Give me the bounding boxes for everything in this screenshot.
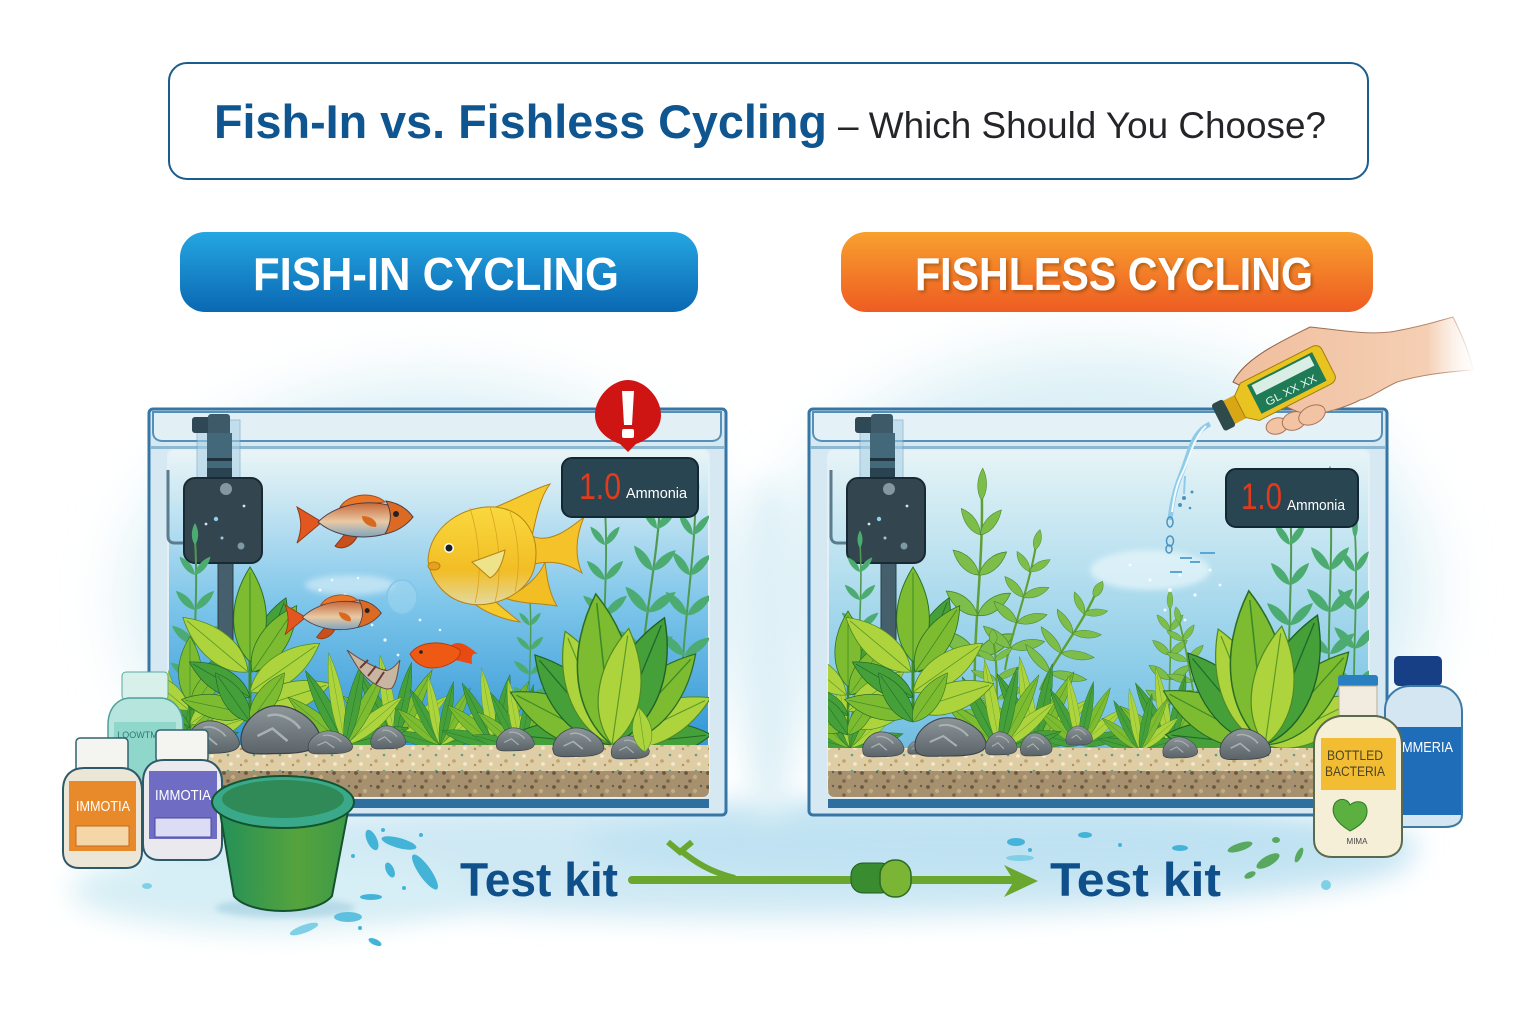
blue bottle: MMERIA	[1402, 739, 1453, 756]
gravel substrate	[828, 748, 1313, 797]
ammonia readout	[1226, 469, 1358, 527]
water	[828, 450, 1369, 797]
label: test kit right: Test kit	[1050, 853, 1221, 906]
fish: orange fish top	[297, 495, 413, 548]
water pour stream	[1166, 424, 1210, 553]
fish: large yellow fish	[428, 484, 584, 622]
bottled bacteria bottle: BACTERIA	[1325, 763, 1386, 779]
teal bottle: LOOWTMILLI	[117, 730, 173, 740]
label: test kit left: Test kit	[460, 853, 618, 906]
rocks	[185, 706, 649, 759]
ammonia readout: Ammonia	[1287, 497, 1346, 514]
orange bottle	[63, 738, 142, 868]
bucket	[212, 776, 355, 918]
dosing bottle	[1208, 343, 1338, 437]
hand	[1233, 317, 1473, 417]
water	[168, 450, 709, 797]
hand pouring bottle	[1208, 317, 1473, 437]
water sparkles	[318, 577, 441, 656]
panel: fishless aquarium	[787, 409, 1387, 815]
water droplets: right	[1006, 832, 1331, 890]
fingers	[1264, 401, 1328, 437]
bubble	[387, 580, 417, 614]
filter	[168, 414, 262, 652]
gravel substrate	[168, 745, 709, 798]
header pill: fishless cycling: FISHLESS CYCLING	[915, 248, 1313, 300]
teal bottle	[108, 672, 183, 790]
bottled bacteria bottle	[1314, 675, 1402, 857]
ammonia readout: 1.0	[1241, 476, 1282, 517]
fish: orange fish lower	[285, 595, 381, 639]
exclamation mark	[622, 391, 634, 438]
fish: red fish	[410, 643, 478, 668]
supplement bottles: left group	[63, 672, 222, 868]
shrimp	[347, 650, 400, 689]
infographic canvas	[62, 62, 1473, 946]
aquarium contents	[120, 464, 724, 798]
dosing bottle: GL XX XX	[1264, 372, 1320, 409]
header pill: fish-in cycling	[180, 232, 698, 312]
header pill: fish-in cycling: FISH-IN CYCLING	[253, 248, 619, 300]
bottled bacteria bottle: BOTTLED	[1327, 747, 1383, 763]
ammonia readout: 1.0	[579, 466, 621, 507]
orange bottle: IMMOTIA	[76, 798, 130, 815]
rocks	[863, 718, 1271, 760]
supplement bottles: right group	[1314, 656, 1462, 857]
panel: fish-in aquarium	[120, 409, 726, 815]
water ripple sparkles	[1128, 553, 1221, 621]
ammonia readout: Ammonia	[626, 485, 688, 502]
water droplets: left	[142, 828, 442, 948]
purple bottle	[143, 730, 222, 860]
filter	[831, 414, 925, 652]
ammonia readout	[562, 458, 698, 517]
foreground leaves	[632, 707, 652, 753]
title: subheading: – Which Should You Choose?	[838, 105, 1326, 146]
icon: leaf heart	[1333, 799, 1367, 831]
header pill: fishless cycling	[841, 232, 1373, 312]
blue bottle	[1385, 656, 1462, 827]
bottled bacteria bottle: MIMA	[1347, 837, 1368, 846]
purple bottle: IMMOTIA	[155, 787, 211, 804]
arrow: connecting test kits	[632, 842, 1038, 897]
warning icon	[595, 380, 661, 452]
title box	[169, 63, 1368, 179]
aquarium contents	[787, 466, 1379, 798]
connector valve	[851, 860, 911, 897]
title: main heading: Fish-In vs. Fishless Cycling	[214, 95, 827, 148]
